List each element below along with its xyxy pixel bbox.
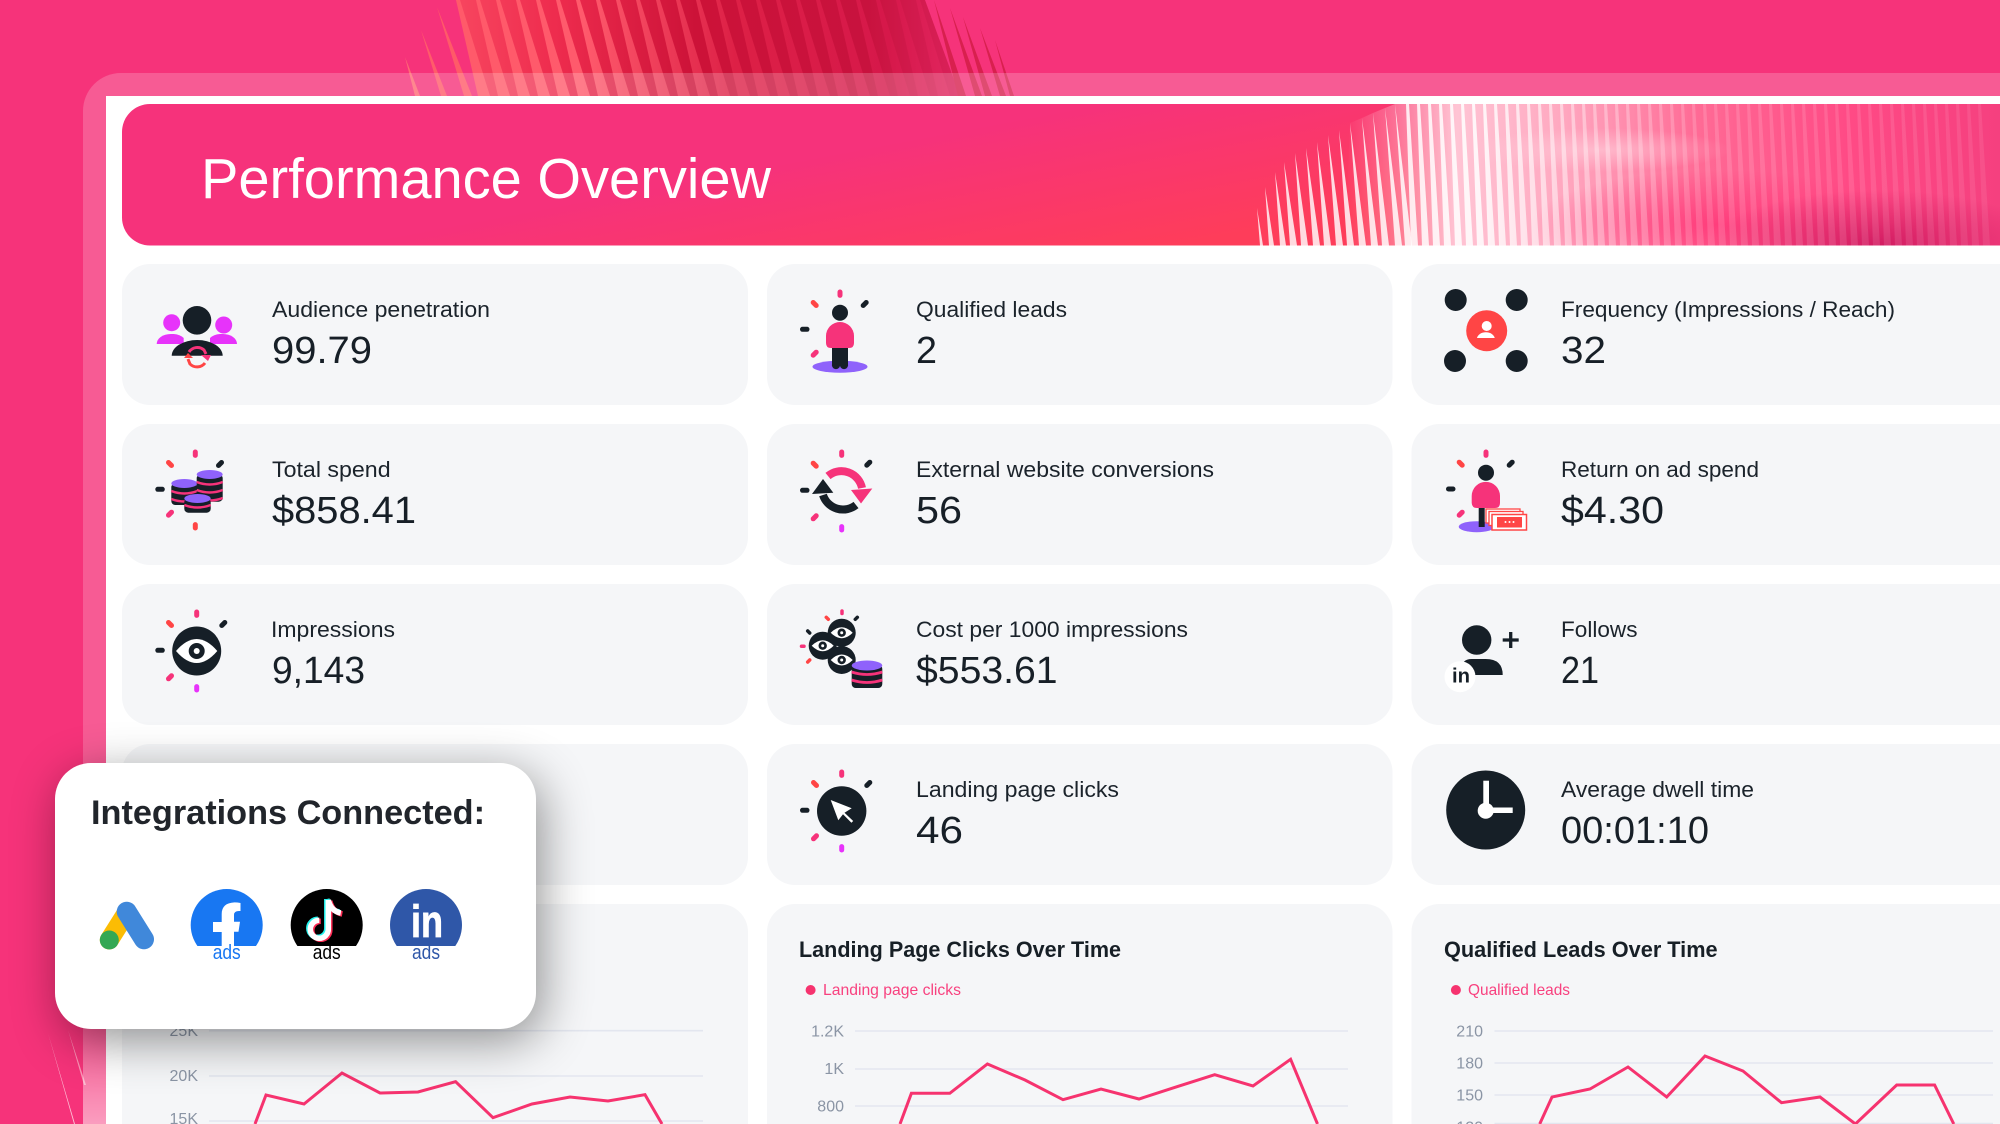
icon: follower with LinkedIn badge: in bbox=[1452, 666, 1470, 688]
label: Follows bbox=[1561, 617, 1638, 642]
y axis labels bbox=[1456, 1024, 1483, 1124]
label: Cost per 1000 impressions bbox=[916, 617, 1188, 642]
decorative spikes: top bbox=[405, 0, 1014, 96]
value: 56 bbox=[916, 490, 962, 532]
icon: LinkedIn Ads bbox=[390, 889, 462, 964]
value: 9,143 bbox=[272, 650, 365, 692]
line series bbox=[255, 1073, 662, 1124]
icon: network bbox=[1444, 289, 1528, 372]
callout heading: Integrations Connected: bbox=[91, 794, 485, 832]
icon: coins bbox=[158, 452, 223, 528]
icon: eyes and coins bbox=[802, 611, 882, 688]
panel: impressions bbox=[122, 584, 748, 725]
line series bbox=[1540, 1056, 1954, 1124]
panel: cost per 1000 impressions bbox=[767, 584, 1392, 725]
panel: landing page clicks chart bbox=[767, 904, 1392, 1124]
value: 32 bbox=[1561, 330, 1606, 372]
value: $4.30 bbox=[1561, 490, 1664, 532]
label: Impressions bbox=[271, 617, 395, 642]
panel: average dwell time bbox=[1412, 744, 2000, 885]
value: 99.79 bbox=[272, 330, 372, 372]
gridlines bbox=[1494, 1031, 1993, 1124]
label: Return on ad spend bbox=[1561, 457, 1759, 482]
icon: TikTok Ads bbox=[291, 889, 363, 964]
gridlines bbox=[855, 1031, 1348, 1106]
icon: Google Ads bbox=[100, 912, 144, 950]
icon: LinkedIn Ads: in bbox=[411, 896, 443, 947]
icon: clock bbox=[1446, 770, 1525, 850]
chart title: Qualified Leads Over Time bbox=[1444, 937, 1718, 962]
value: $553.61 bbox=[916, 650, 1058, 692]
icon: person with cash bbox=[1448, 452, 1526, 532]
icon: Facebook Ads bbox=[191, 889, 263, 964]
chart title: Landing Page Clicks Over Time bbox=[799, 937, 1121, 962]
value: 46 bbox=[916, 810, 963, 852]
label: Total spend bbox=[272, 457, 391, 482]
y axis labels bbox=[811, 1024, 844, 1116]
icon: TikTok Ads: ads bbox=[313, 942, 341, 964]
value: 00:01:10 bbox=[1561, 810, 1709, 852]
icon: refresh arrows bbox=[802, 452, 872, 530]
icon: eye bbox=[158, 612, 225, 690]
panel: external website conversions bbox=[767, 424, 1392, 565]
label: Average dwell time bbox=[1561, 777, 1754, 802]
legend: Qualified leads bbox=[1468, 982, 1570, 999]
value: $858.41 bbox=[272, 490, 416, 532]
icon: person bbox=[802, 292, 868, 373]
icon: Facebook Ads: ads bbox=[213, 942, 241, 964]
panel: landing page clicks bbox=[767, 744, 1392, 885]
y axis labels: 180 bbox=[1456, 1056, 1483, 1072]
panel: qualified leads bbox=[767, 264, 1392, 405]
bottom-left frame highlight bbox=[83, 1030, 106, 1124]
panel: left chart bbox=[122, 904, 748, 1124]
panel: follows bbox=[1412, 584, 2000, 725]
label: Audience penetration bbox=[272, 297, 490, 322]
callout: integrations connected bbox=[55, 763, 536, 1029]
header banner bbox=[122, 104, 2000, 246]
y axis labels bbox=[170, 1023, 198, 1124]
panel: frequency bbox=[1412, 264, 2000, 405]
value: 2 bbox=[916, 330, 937, 372]
y axis labels: 800 bbox=[817, 1098, 844, 1116]
panel: return on ad spend bbox=[1412, 424, 2000, 565]
title: Performance Overview bbox=[201, 147, 772, 211]
gridlines bbox=[209, 1031, 703, 1121]
panel: hidden metric card bbox=[122, 744, 748, 885]
panel: total spend bbox=[122, 424, 748, 565]
y axis labels: 1K bbox=[824, 1061, 844, 1078]
y axis labels: 150 bbox=[1456, 1088, 1483, 1104]
line series bbox=[900, 1059, 1318, 1124]
y axis labels: 20K bbox=[170, 1068, 198, 1085]
icon: cursor bbox=[802, 772, 870, 850]
label: External website conversions bbox=[916, 457, 1214, 482]
label: Qualified leads bbox=[916, 297, 1067, 322]
y axis labels: 210 bbox=[1456, 1024, 1483, 1040]
label: Landing page clicks bbox=[916, 777, 1119, 802]
legend: Landing page clicks bbox=[823, 982, 961, 999]
y axis labels: 1.2K bbox=[811, 1024, 844, 1040]
icon: audience bbox=[157, 306, 237, 367]
panel: audience penetration bbox=[122, 264, 748, 405]
icon: follower with LinkedIn badge bbox=[1444, 625, 1519, 692]
decorative spikes: bottom left bbox=[48, 1030, 86, 1124]
y axis labels: 25K bbox=[170, 1023, 198, 1040]
label: Frequency (Impressions / Reach) bbox=[1561, 297, 1895, 322]
icon: LinkedIn Ads: ads bbox=[412, 942, 440, 964]
panel: qualified leads chart bbox=[1412, 904, 2000, 1124]
value: 21 bbox=[1561, 650, 1599, 692]
